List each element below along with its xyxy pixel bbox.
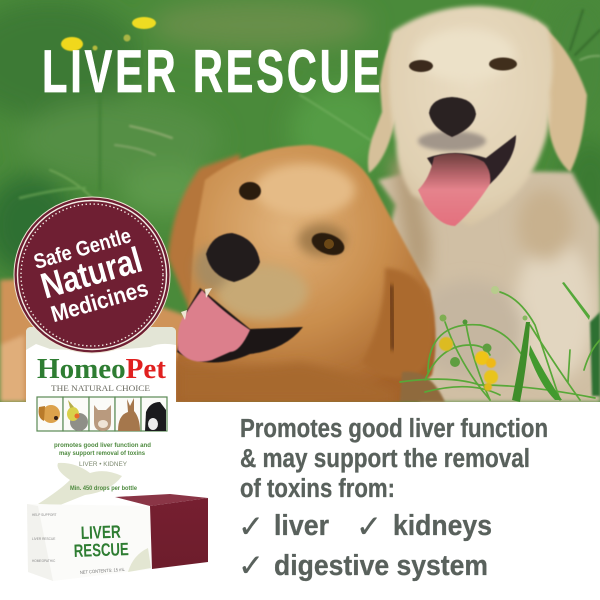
line 3: of toxins from: [240,475,395,503]
claim text line 2: may support removal of toxins [59,450,145,457]
leaf [38,463,122,505]
left ear [368,32,412,173]
icon: cockatiel [67,400,88,431]
nose [429,97,476,137]
net contents: NET CONTENTS: 15 mL [80,567,125,575]
badge text: Safe Gentle [31,224,134,274]
box upper panel [26,327,176,512]
tagline: THE NATURAL CHOICE [51,383,150,393]
brand name: HomeoPet [37,353,166,385]
claim text: promotes good liver function and [54,442,151,449]
product name line 2: RESCUE [73,539,129,561]
product box [26,327,208,581]
checklist: digestive system: digestive system [274,550,488,582]
orange fur on left [0,276,200,402]
line 1: Promotes good liver function [240,415,548,443]
side small print: HELP SUPPORT [32,513,57,517]
grass blade [562,282,590,320]
line 2: & may support the removal [240,445,530,473]
drops text: Min. 450 drops per bottle [70,485,137,492]
icon: kitten [94,405,111,431]
title: LIVER RESCUE [42,38,383,105]
head highlight [415,29,515,81]
dog: cream golden retriever [368,6,600,402]
chest shadow [178,362,395,402]
grass tuft under dog [400,372,445,402]
icon: rabbit [118,398,140,431]
body shading [392,160,595,380]
yellow wildflowers [61,17,156,51]
photo: grass background [0,0,600,402]
icon: puppy [39,405,60,423]
icon: black and white dog [145,402,166,431]
brow shade [298,224,346,256]
side small print [32,513,57,563]
box lower white front [27,504,152,581]
head and body [176,145,436,402]
checklist: liver: ✓ [238,509,264,545]
side small print: HOMEOPATHIC [32,559,56,563]
left ear fur [168,154,240,310]
eyes [409,60,433,72]
checklist: kidneys [356,509,492,545]
ear fold [391,285,393,350]
box maroon top [115,494,208,506]
bottom leaf [128,548,151,572]
muzzle shadow [418,131,486,151]
checklist: digestive system: ✓ [238,548,264,584]
green corner [590,312,600,396]
checklist: liver: liver [274,510,329,542]
cream body [378,170,600,402]
right ear [362,268,433,378]
checklist: kidneys: kidneys [393,510,492,542]
right ear [535,20,587,172]
badge text [31,223,153,328]
foreground grass and flowers [400,282,600,402]
badge disc [14,197,170,353]
head [389,6,553,226]
eyes [239,182,261,200]
mouth [427,135,516,184]
side small print: LIVER RESCUE [32,537,55,541]
benefit text block [238,415,548,584]
badge ring [18,200,166,350]
forehead highlight [255,164,355,216]
tongue [178,290,250,362]
dog: golden brown retriever [168,145,436,402]
grass blades center [512,322,530,402]
yellow flowers [439,337,498,391]
indication: LIVER • KIDNEY [79,462,127,468]
box left side shade [27,504,53,581]
badge text: Natural [36,239,146,306]
animal photo strip [37,397,167,431]
badge dotted ring [21,204,163,346]
white lower panel [0,402,600,600]
checklist: liver [238,509,329,545]
box top leaf band [26,327,176,350]
checklist: kidneys: ✓ [356,509,382,545]
product name: LIVER [80,522,121,543]
muzzle [216,264,308,320]
teeth [181,288,212,320]
mouth [177,288,303,363]
box maroon side [150,498,208,569]
badge: safe gentle natural medicines [14,197,170,353]
flower buds [491,286,499,294]
tongue [418,153,490,226]
badge text: Medicines [48,275,151,327]
nose [206,233,260,282]
